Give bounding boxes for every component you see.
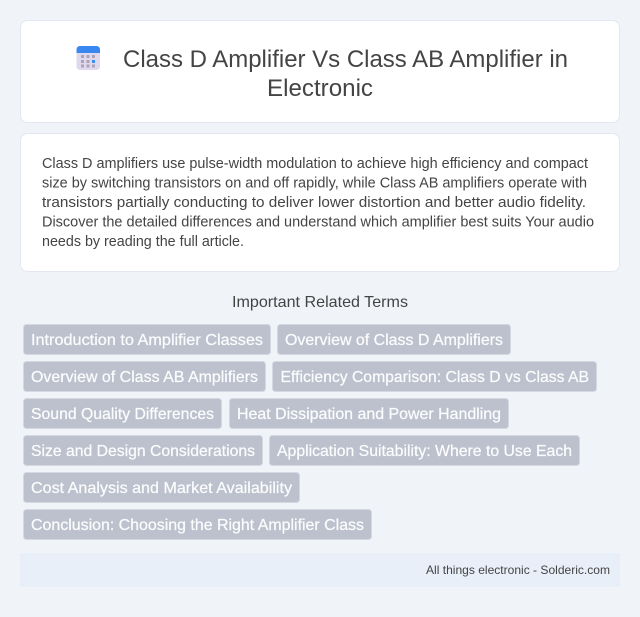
heading: related terms: Important Related Terms — [232, 294, 408, 311]
tag: Overview of Class AB Amplifiers — [31, 369, 258, 386]
tag — [230, 398, 508, 428]
tag: Heat Dissipation and Power Handling — [237, 406, 501, 423]
tag — [272, 362, 596, 392]
panel: header — [20, 20, 620, 122]
title — [123, 46, 568, 102]
tag: Conclusion: Choosing the Right Amplifier Class — [31, 517, 364, 534]
tag — [24, 510, 372, 540]
tag — [270, 436, 580, 466]
tag — [24, 472, 300, 502]
footer — [20, 553, 620, 587]
summary text: Class D amplifiers use pulse-width modulation to achieve high efficiency and compact — [42, 156, 588, 172]
tag — [24, 436, 262, 466]
tags — [24, 324, 596, 540]
tag: Efficiency Comparison: Class D vs Class AB — [280, 369, 589, 386]
tag: Cost Analysis and Market Availability — [31, 480, 292, 497]
summary text: transistors partially conducting to deliver lower distortion and better audio fidelity. — [42, 195, 586, 211]
tag — [24, 362, 266, 392]
tag: Application Suitability: Where to Use Each — [277, 443, 572, 460]
icon: calendar — [76, 46, 100, 70]
summary text: needs by reading the full article. — [42, 234, 244, 250]
tag: Size and Design Considerations — [31, 443, 255, 460]
summary text — [42, 156, 594, 250]
title: Electronic — [267, 75, 373, 102]
footer: All things electronic - Solderic.com — [426, 563, 610, 577]
title: Class D Amplifier Vs Class AB Amplifier in — [123, 46, 568, 73]
summary text: size by switching transistors on and off rapidly, while Class AB amplifiers operate with — [42, 176, 587, 192]
panel: summary — [20, 134, 620, 272]
tag — [24, 324, 270, 354]
summary text: Discover the detailed differences and understand which amplifier best suits Your audio — [42, 214, 594, 230]
tag — [278, 324, 510, 354]
tag: Overview of Class D Amplifiers — [285, 332, 503, 349]
tag: Introduction to Amplifier Classes — [31, 332, 263, 349]
tag: Sound Quality Differences — [31, 406, 214, 423]
tag — [24, 398, 222, 428]
